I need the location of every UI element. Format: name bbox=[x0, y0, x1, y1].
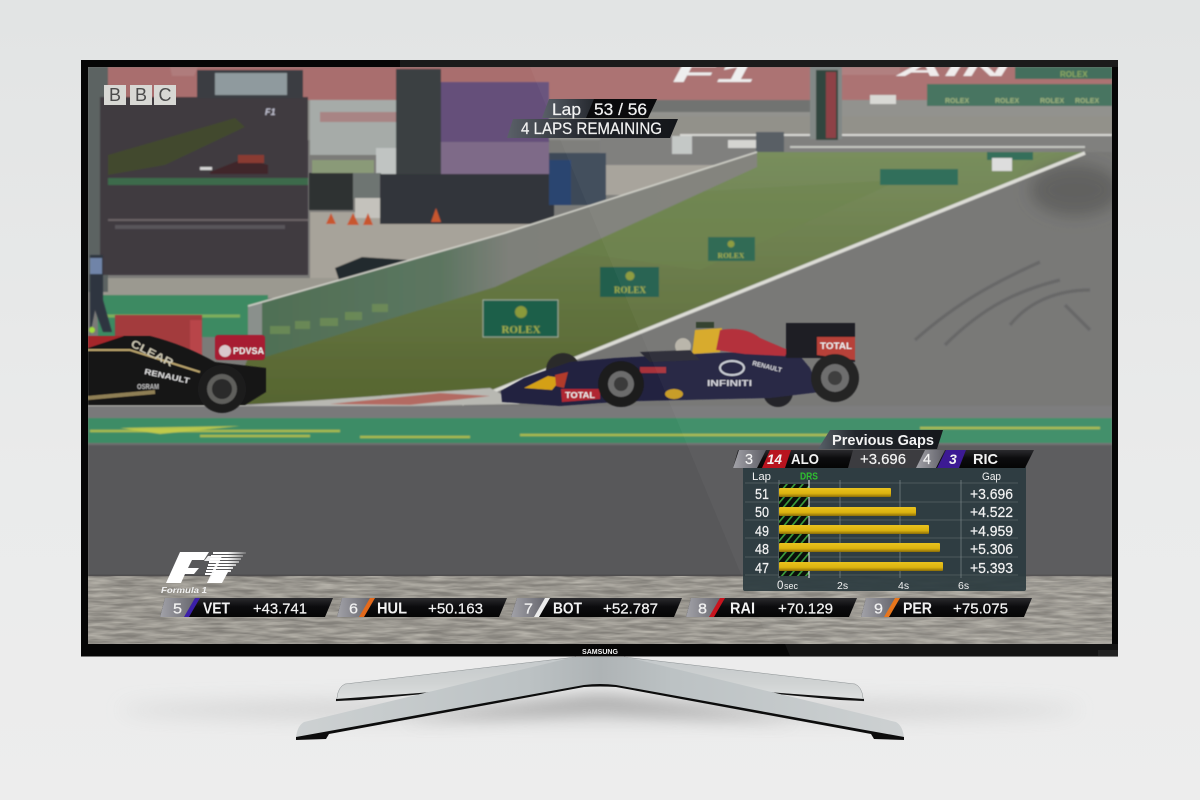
red bull car: RENAULT bbox=[752, 360, 782, 374]
BBC logo bbox=[104, 85, 176, 105]
scene: rolex boards: ROLEX bbox=[614, 285, 646, 295]
ticker: PER: 9 bbox=[874, 600, 883, 618]
driver comparison row: 4 bbox=[923, 451, 931, 468]
stand shadow on floor bbox=[120, 695, 1080, 722]
ticker: RAI: +70.129 bbox=[778, 600, 833, 618]
race video frame bbox=[88, 58, 1120, 644]
BBC logo: B bbox=[109, 85, 121, 105]
axis labels: 2s bbox=[837, 580, 848, 592]
lap numbers: 50 bbox=[755, 504, 769, 521]
back right leg bbox=[624, 657, 864, 701]
lotus car: RENAULT bbox=[144, 367, 191, 386]
ticker: VET: 5 bbox=[173, 600, 182, 618]
ticker: RAI: RAI bbox=[730, 600, 755, 618]
lap numbers: 51 bbox=[755, 486, 769, 503]
scene: rolex boards: ROLEX bbox=[718, 251, 745, 260]
column headers: Gap bbox=[982, 471, 1001, 483]
BBC logo: B bbox=[135, 85, 147, 105]
ticker: HUL bbox=[337, 598, 507, 618]
infographic: TV showing race broadcast bbox=[81, 60, 1118, 740]
red bull car: INFINITI bbox=[707, 379, 752, 388]
scene background: grandstand and far track: F1 bbox=[672, 58, 756, 88]
front legs bbox=[296, 657, 904, 738]
ticker: RAI: 8 bbox=[698, 600, 707, 618]
driver comparison row: 3 bbox=[745, 451, 753, 468]
lap numbers: 49 bbox=[755, 523, 769, 540]
gap values: +4.959 bbox=[970, 523, 1013, 540]
lap counter: 53 / 56 bbox=[594, 100, 647, 119]
scene background: grandstand and far track: AIN bbox=[894, 59, 1011, 81]
gap values: +5.393 bbox=[970, 560, 1013, 577]
lap numbers: 48 bbox=[755, 541, 769, 558]
ticker: HUL: HUL bbox=[377, 600, 407, 618]
driver comparison row: ALO bbox=[791, 451, 819, 468]
axis labels: 4s bbox=[898, 580, 909, 592]
column headers: DRS bbox=[800, 472, 818, 482]
scene: low green infield bbox=[98, 295, 268, 337]
previous gaps panel bbox=[733, 430, 1034, 592]
driver comparison row: RIC bbox=[973, 451, 998, 468]
scene: big screen with tower bbox=[88, 67, 108, 292]
lap numbers: 47 bbox=[755, 560, 769, 577]
red bull car: TOTAL bbox=[565, 391, 595, 400]
lotus car: CLEAR bbox=[129, 338, 175, 370]
ticker: PER bbox=[861, 598, 1032, 618]
scene: white track edge line bbox=[462, 153, 1085, 404]
ticker: BOT: +52.787 bbox=[603, 600, 658, 618]
F1 logo: Formula 1 bbox=[161, 586, 208, 595]
ticker: RAI bbox=[686, 598, 857, 618]
gap values: +4.522 bbox=[970, 504, 1013, 521]
driver comparison row: 14 bbox=[767, 451, 782, 467]
scene: rolex boards bbox=[483, 152, 1033, 337]
grid lines bbox=[745, 480, 1018, 578]
driver comparison row: +3.696 bbox=[860, 451, 906, 468]
scene background: grandstand and far track: ROLEX bbox=[1075, 98, 1099, 105]
ticker: PER: +75.075 bbox=[953, 600, 1008, 618]
scene: far ground bbox=[606, 165, 730, 195]
previous gaps header: Previous Gaps bbox=[832, 432, 934, 449]
DRS zone hatching bbox=[779, 484, 809, 576]
lap counter bbox=[507, 99, 678, 138]
column headers bbox=[752, 472, 1000, 482]
scene background: grandstand and far track: F1 bbox=[265, 107, 276, 117]
driver comparison row bbox=[733, 450, 1034, 468]
ticker: BOT bbox=[511, 598, 682, 618]
scene: track-side rolex hoardings far bbox=[1015, 67, 1112, 79]
gap values: +3.696 bbox=[970, 486, 1013, 503]
scene: stage structure and dark containers bbox=[396, 69, 441, 174]
TV stand bbox=[296, 657, 904, 740]
axis labels: sec bbox=[784, 581, 798, 591]
ticker: HUL: 6 bbox=[349, 600, 358, 618]
scene: timing tower bbox=[810, 67, 842, 139]
axis labels: 6s bbox=[958, 580, 969, 592]
scene background: grandstand and far track: ROLEX bbox=[1040, 98, 1064, 105]
ticker: HUL: +50.163 bbox=[428, 600, 483, 618]
ticker: VET: VET bbox=[203, 600, 230, 618]
panel body bbox=[743, 466, 1026, 591]
scene: barriers and track marshal bbox=[89, 255, 202, 358]
axis labels: 0 bbox=[777, 580, 783, 592]
gap values bbox=[970, 486, 1013, 577]
scene: kerb and near track bbox=[88, 386, 520, 407]
scene background: grandstand and far track: ROLEX bbox=[995, 98, 1019, 105]
ticker: VET: +43.741 bbox=[253, 600, 307, 618]
lap numbers bbox=[755, 486, 769, 577]
BBC logo: C bbox=[158, 85, 172, 105]
column headers: Lap bbox=[752, 471, 771, 483]
scene background: grandstand and far track bbox=[88, 67, 1112, 577]
scene background: grandstand and far track: ROLEX bbox=[945, 98, 969, 105]
back left leg bbox=[336, 657, 576, 701]
lotus car bbox=[88, 335, 266, 413]
red bull car bbox=[501, 322, 859, 407]
TV bezel bbox=[81, 60, 1118, 656]
scene: grass wedge bbox=[230, 152, 1085, 405]
standings ticker bbox=[160, 598, 1032, 618]
lap counter: Lap bbox=[552, 100, 581, 119]
ticker: VET bbox=[160, 598, 333, 618]
scene: rolex boards: ROLEX bbox=[501, 324, 541, 336]
ticker: BOT: 7 bbox=[524, 600, 533, 618]
gravel texture bbox=[88, 576, 1112, 644]
gap values: +5.306 bbox=[970, 541, 1013, 558]
scene background: grandstand and far track: ROLEX bbox=[1060, 70, 1088, 79]
lotus car: OSRAM bbox=[137, 384, 159, 391]
scene: track surface bbox=[430, 152, 1112, 420]
driver comparison row: 3 bbox=[949, 451, 957, 467]
F1 logo bbox=[161, 552, 246, 595]
screen glare bbox=[530, 67, 1112, 644]
red bull car: TOTAL bbox=[820, 341, 852, 352]
axis labels bbox=[777, 580, 969, 589]
ticker: PER: PER bbox=[903, 600, 932, 618]
lap counter: 4 LAPS REMAINING bbox=[521, 120, 662, 138]
brand label: SAMSUNG bbox=[582, 647, 618, 656]
ticker: BOT: BOT bbox=[553, 600, 582, 618]
scene: pit wall bbox=[248, 152, 757, 358]
gap bars bbox=[779, 488, 943, 571]
lotus car: PDVSA bbox=[233, 346, 264, 356]
